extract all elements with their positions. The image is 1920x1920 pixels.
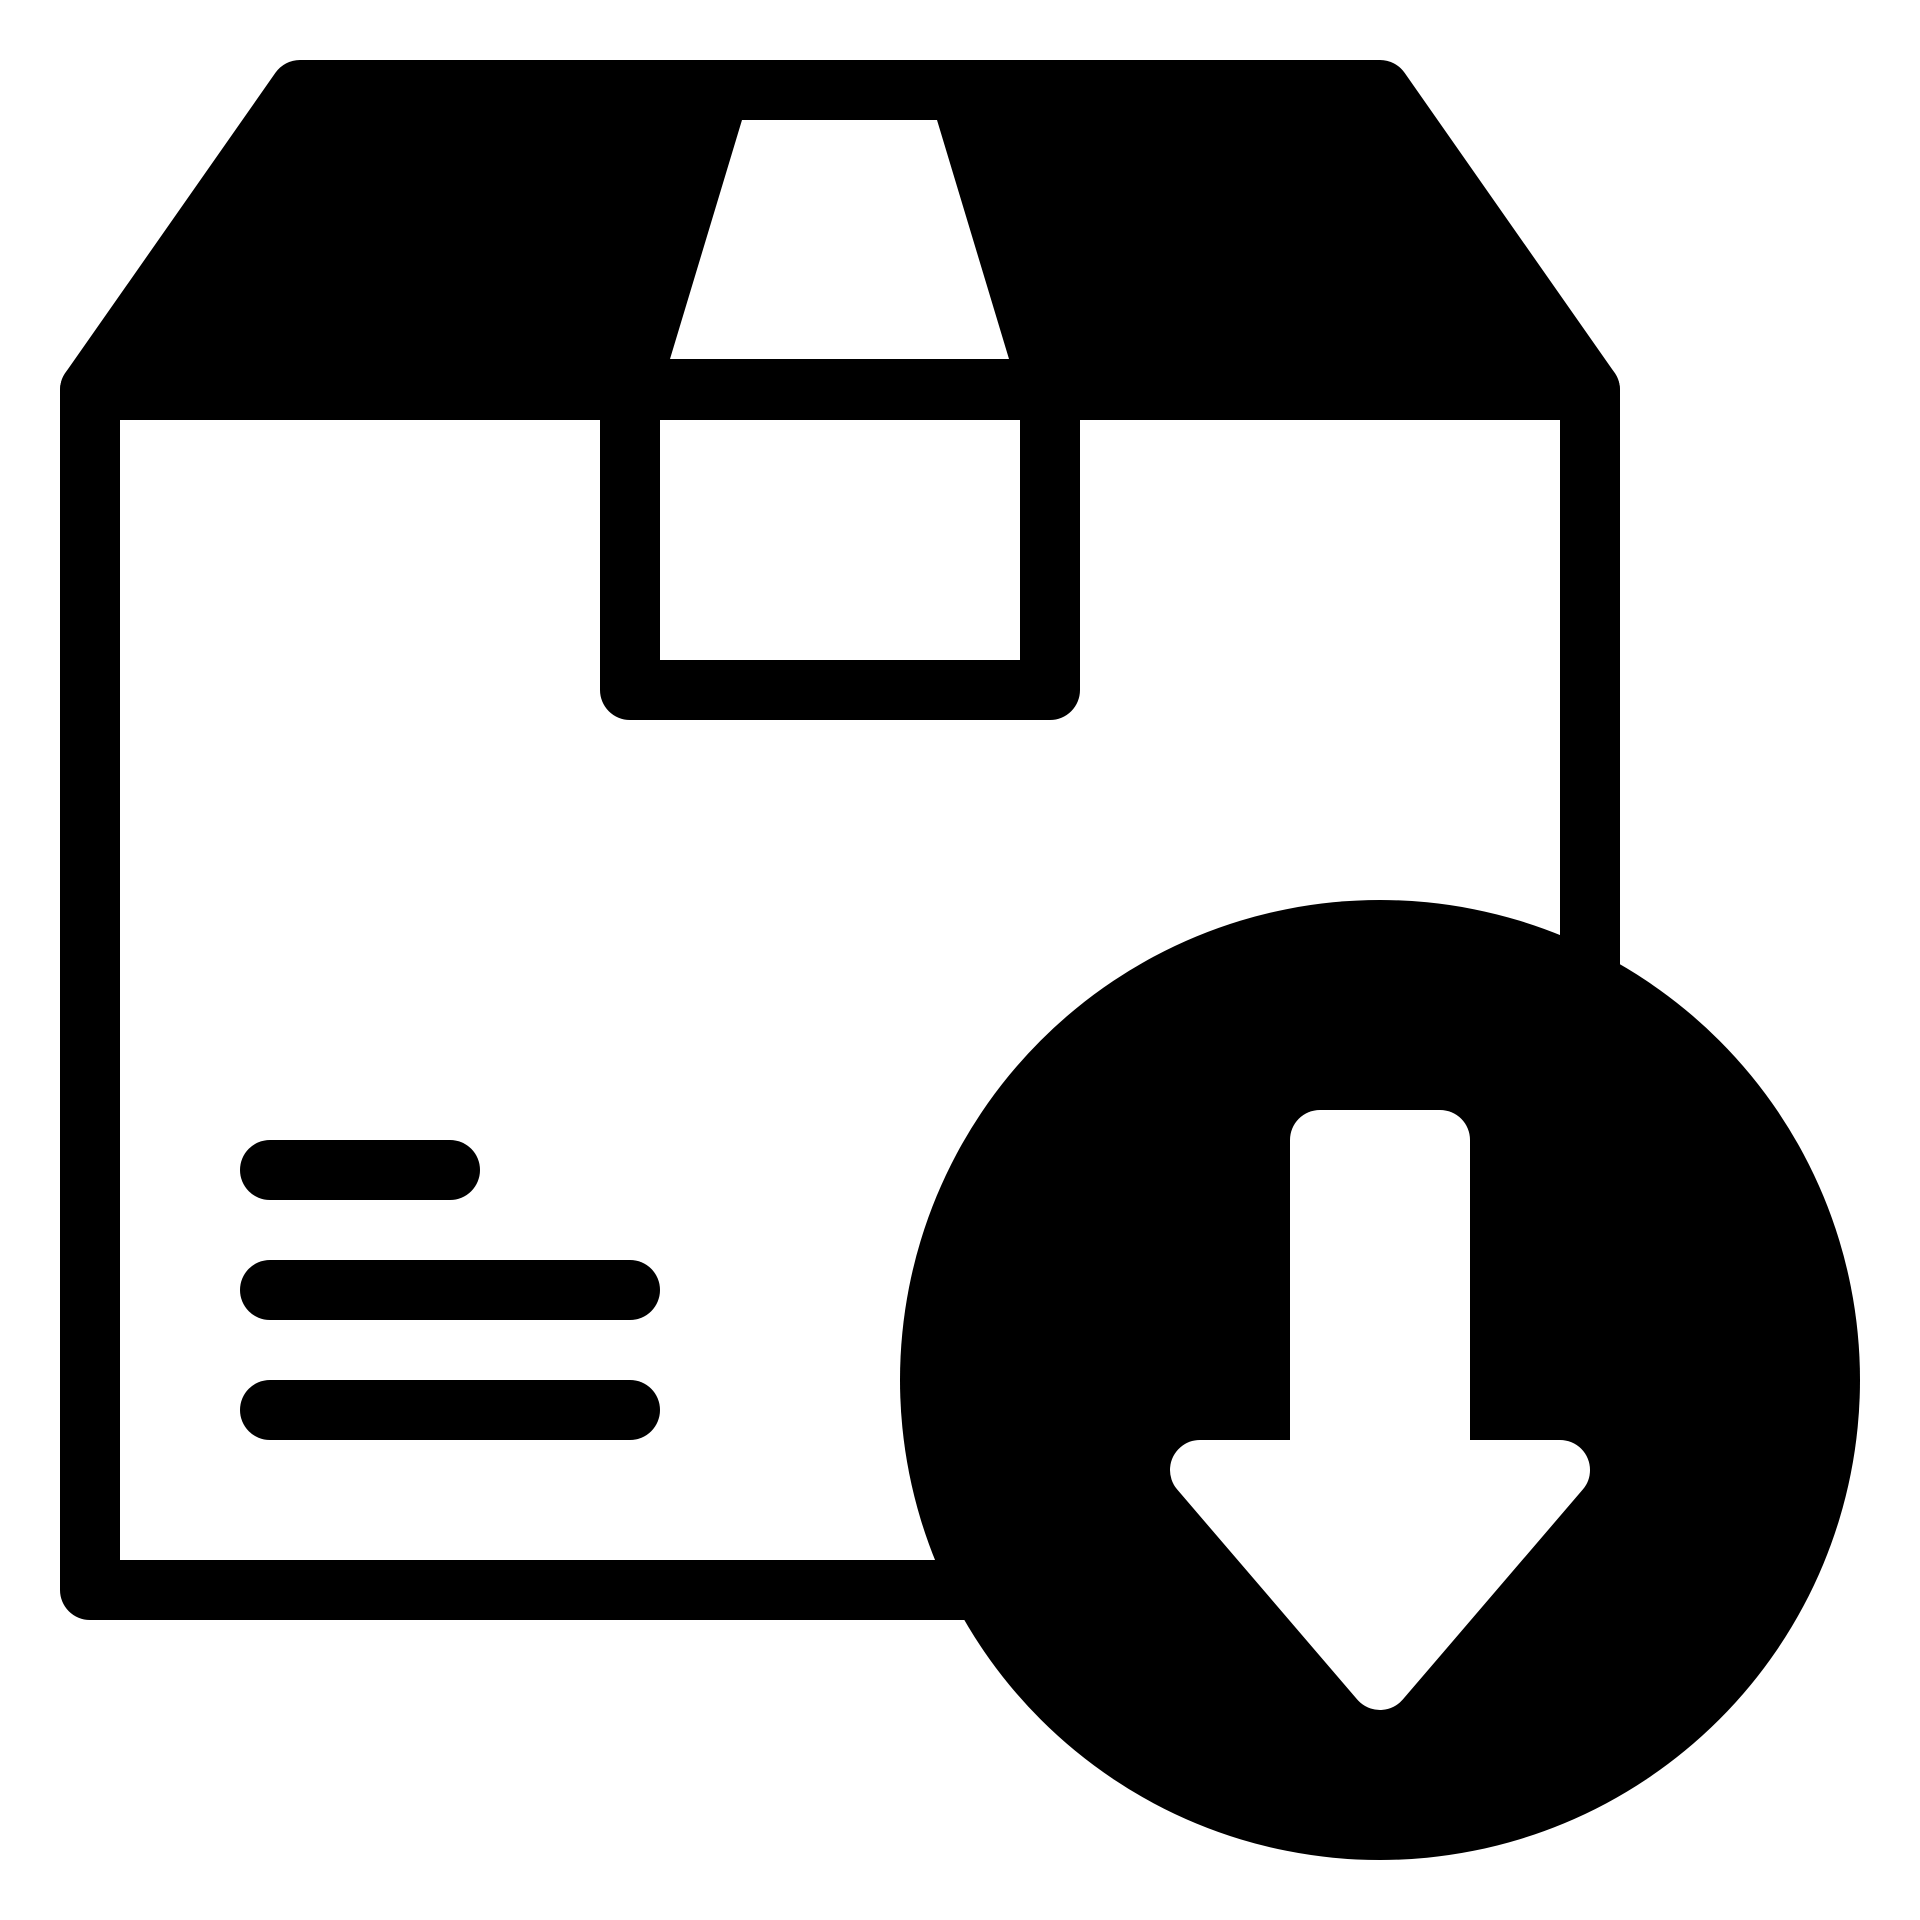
icon: download arrow	[1200, 1110, 1560, 1680]
shipping label lines	[270, 1170, 630, 1410]
packing tape on box front	[630, 390, 1050, 690]
download badge circle	[900, 900, 1860, 1860]
box lid	[90, 90, 1590, 390]
packing tape on lid	[670, 120, 1009, 359]
box body outline	[90, 390, 1590, 1590]
